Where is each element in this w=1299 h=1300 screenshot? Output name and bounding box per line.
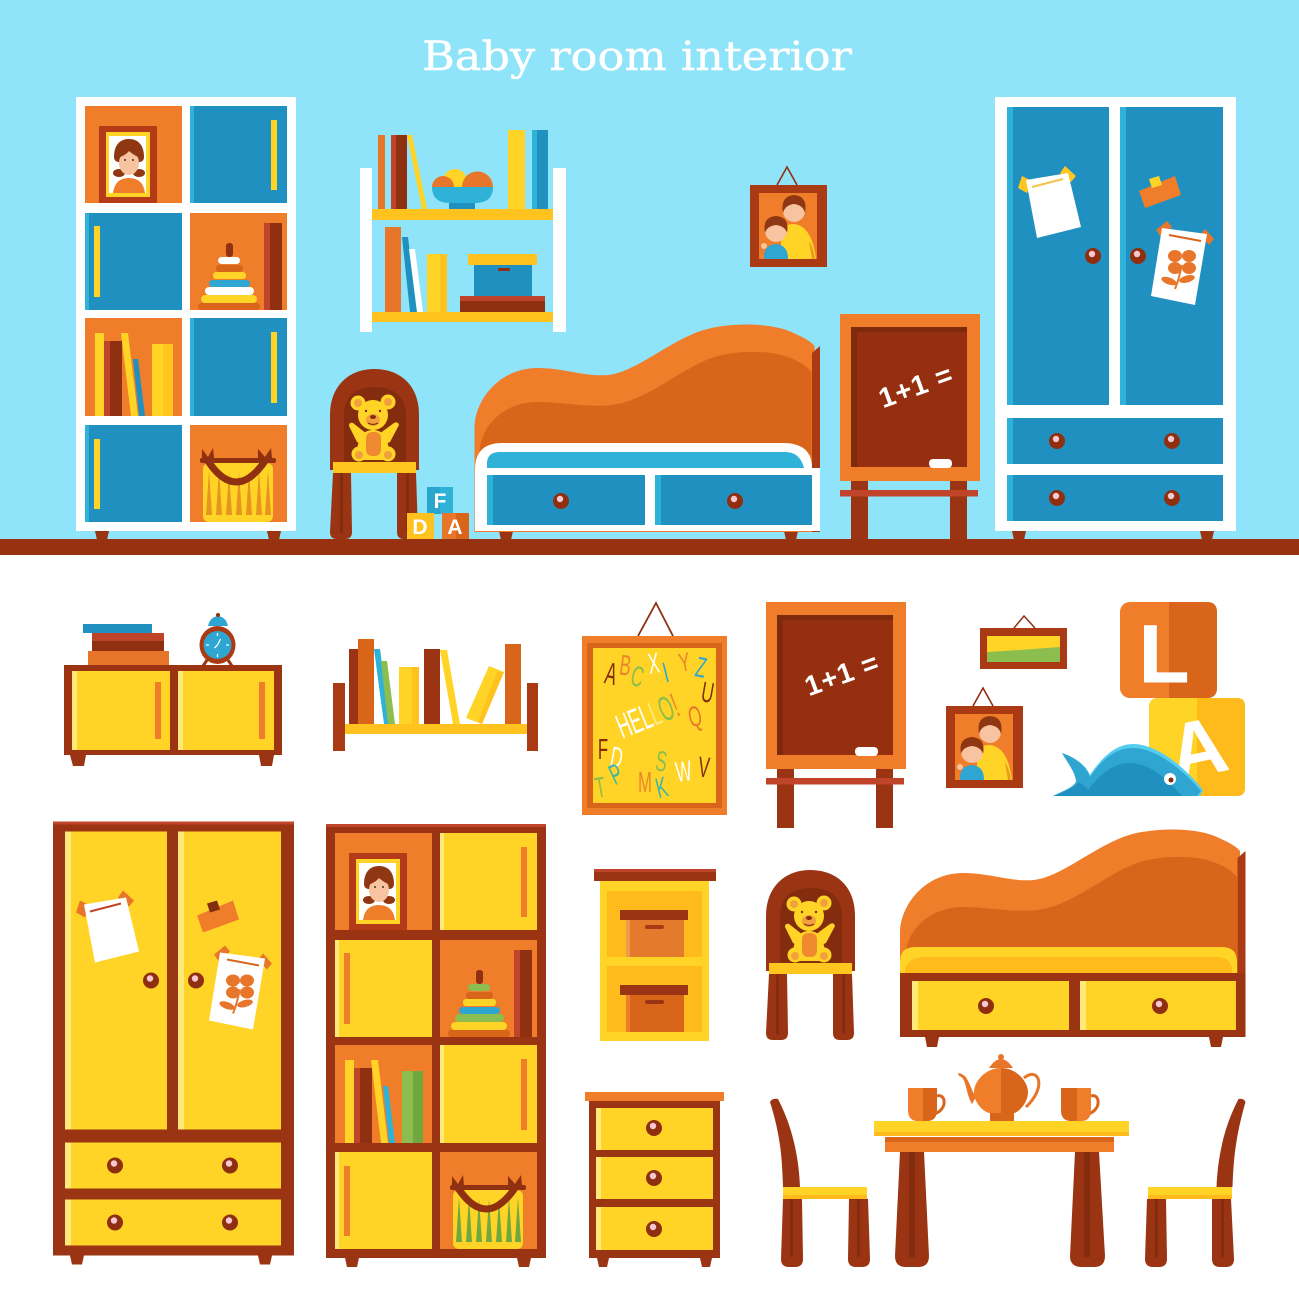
child chair left: [770, 1099, 870, 1267]
scattered letters: A: [602, 656, 620, 693]
blackboard on easel, standalone: 1+1 =: [801, 647, 883, 702]
books and box on lower shelf: [385, 227, 545, 312]
small landscape picture: [980, 616, 1067, 669]
scattered letters: [592, 646, 716, 804]
block A: A: [1160, 699, 1235, 798]
block L: L: [1139, 609, 1189, 700]
scattered letters: M: [638, 766, 652, 798]
chair with teddy bear, standalone: [766, 870, 855, 1040]
fruit bowl: [432, 169, 493, 209]
scattered letters: HELLO!: [611, 686, 685, 746]
toy letter blocks: [407, 487, 469, 539]
toy letter blocks: F: [434, 490, 447, 513]
block L: [1120, 602, 1217, 700]
blackboard on easel: [840, 314, 980, 540]
toy letter blocks: A: [447, 516, 463, 539]
scattered letters: X: [646, 647, 662, 680]
chest of drawers: [585, 1092, 724, 1267]
blackboard on easel: 1+1 =: [875, 359, 957, 414]
wardrobe: yellow and brown: [53, 822, 294, 1264]
framed photo: family: [946, 688, 1023, 788]
scattered letters: F: [598, 733, 608, 765]
bookcase: white and blue: [76, 97, 296, 540]
child chair right: [1145, 1099, 1246, 1267]
scattered letters: B: [618, 649, 633, 682]
sofa bed: yellow and brown: [900, 830, 1246, 1047]
cup left: [908, 1088, 944, 1121]
wardrobe: white and blue: [995, 97, 1236, 540]
scattered letters: D: [608, 741, 625, 774]
low cabinet: [64, 613, 282, 766]
scattered letters: Q: [685, 700, 705, 733]
scattered letters: S: [654, 745, 669, 778]
scattered letters: Y: [676, 646, 693, 678]
stacked books: [83, 624, 169, 665]
books on upper shelf: [378, 130, 548, 209]
framed photo: family on wall: [750, 167, 827, 267]
scattered letters: P: [604, 757, 628, 791]
letter blocks with toy whale: [1053, 602, 1245, 798]
toy whale: [1053, 744, 1203, 796]
lower box: [620, 985, 688, 1032]
bookcase: yellow and brown: [326, 824, 546, 1267]
alphabet board: [582, 603, 727, 815]
background: wall: [0, 0, 1299, 540]
scattered letters: C: [628, 660, 647, 693]
storage unit with boxes: [594, 869, 716, 1041]
cup right: [1061, 1088, 1098, 1121]
alarm clock: [200, 613, 236, 666]
toy letter blocks: D: [412, 516, 428, 539]
wall shelf: [360, 130, 566, 332]
upper box: [620, 910, 688, 957]
scattered letters: K: [652, 771, 671, 804]
scattered letters: W: [674, 754, 694, 788]
floor: [0, 539, 1299, 555]
title: Baby room interior: [422, 34, 853, 80]
chair with teddy bear: [330, 369, 419, 539]
teapot: [958, 1054, 1039, 1121]
scattered letters: U: [699, 676, 716, 709]
scattered letters: V: [697, 751, 711, 784]
tea table with teapot and cups: [874, 1054, 1129, 1267]
blackboard on easel, standalone: [766, 602, 906, 828]
bookshelf with books: [333, 639, 538, 751]
scattered letters: Z: [693, 651, 709, 684]
sofa bed: white and blue: [474, 324, 820, 540]
scattered letters: T: [592, 771, 608, 804]
scattered letters: I: [660, 657, 672, 688]
